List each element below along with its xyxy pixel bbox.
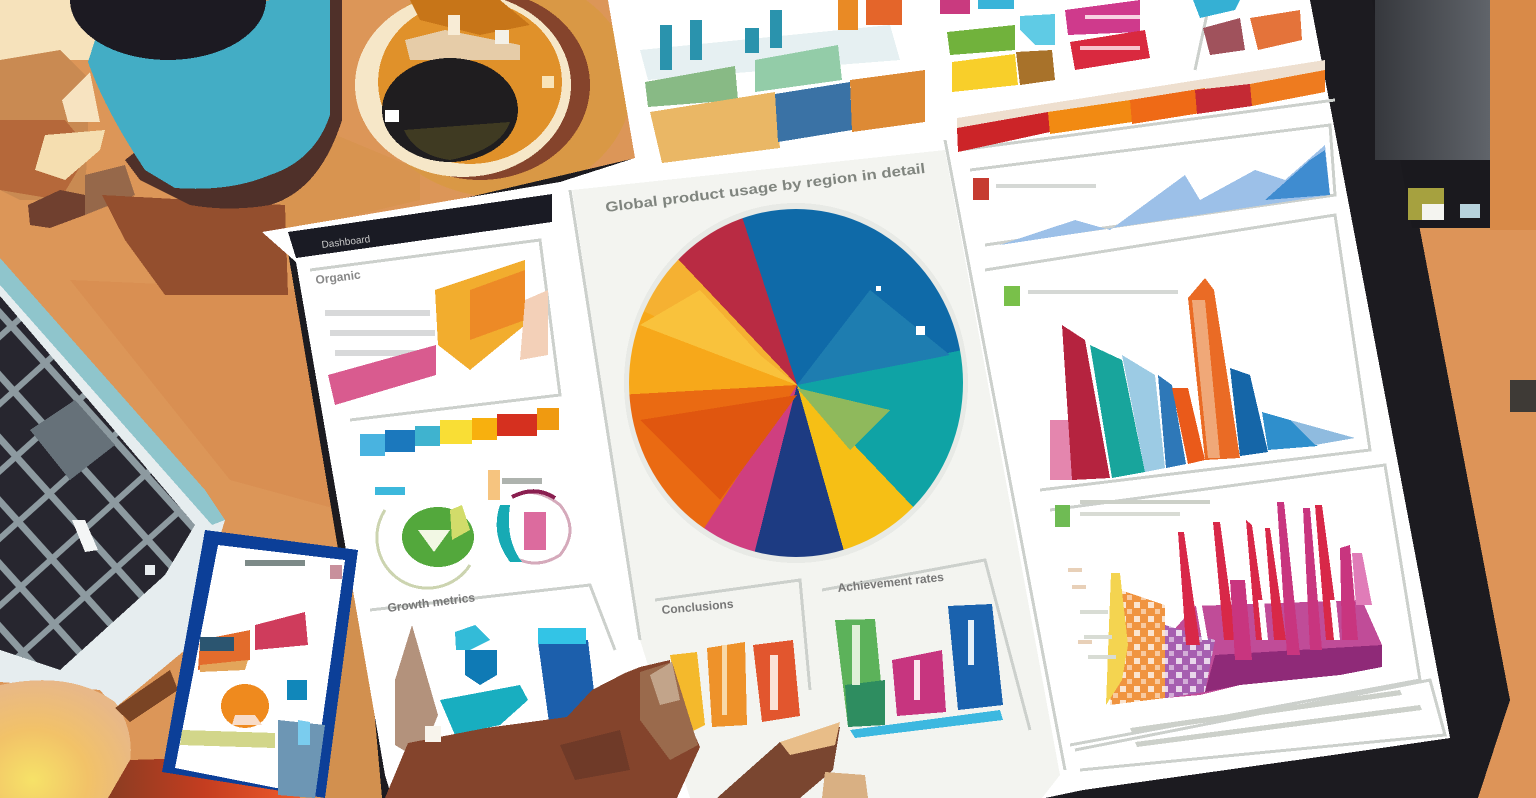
panel: bar icons: Achievement rates (837, 570, 945, 595)
coffee mug (70, 0, 342, 208)
hand holding report (385, 660, 868, 798)
mug shadow (102, 195, 288, 295)
panel: organic chart (315, 260, 548, 405)
edge clip right (1510, 380, 1536, 412)
color strip left (360, 408, 559, 456)
panel: bottom left chart (387, 590, 595, 760)
tablet body (286, 0, 1510, 798)
column dividers (310, 0, 1445, 770)
panel: conclusions bars (661, 597, 800, 735)
tall bar chart (1004, 278, 1355, 480)
icon: pink ring gauge (488, 470, 570, 563)
icon: green ring gauge (375, 487, 474, 588)
laptop keyboard (0, 258, 225, 708)
footer note lines (1130, 690, 1422, 747)
heading: pie chart title: Global product usage by region in detail (604, 160, 926, 215)
panel: center column shade (572, 150, 1060, 798)
phone (162, 530, 358, 798)
purple spike chart (1055, 500, 1382, 705)
panel: conclusions bars: Conclusions (661, 597, 734, 617)
area chart top right (973, 145, 1330, 245)
top panel: green yellow blocks (940, 0, 1302, 92)
panel: organic chart: Organic (315, 268, 362, 287)
pie chart (624, 203, 968, 563)
wood gap left of report (322, 560, 382, 798)
espresso cup and saucer (355, 0, 632, 197)
hand lower left (0, 670, 300, 798)
dark device top right (1372, 0, 1490, 228)
hand top left behind mug (0, 0, 135, 228)
panel: bottom left chart: Growth metrics (387, 590, 476, 615)
gradient color strip (957, 60, 1325, 152)
panel: bar icons (835, 570, 1003, 738)
panel header bar (288, 194, 552, 258)
panel header bar: Dashboard (321, 234, 371, 251)
top panel: small blocks (640, 0, 925, 163)
report paper (262, 0, 1450, 798)
